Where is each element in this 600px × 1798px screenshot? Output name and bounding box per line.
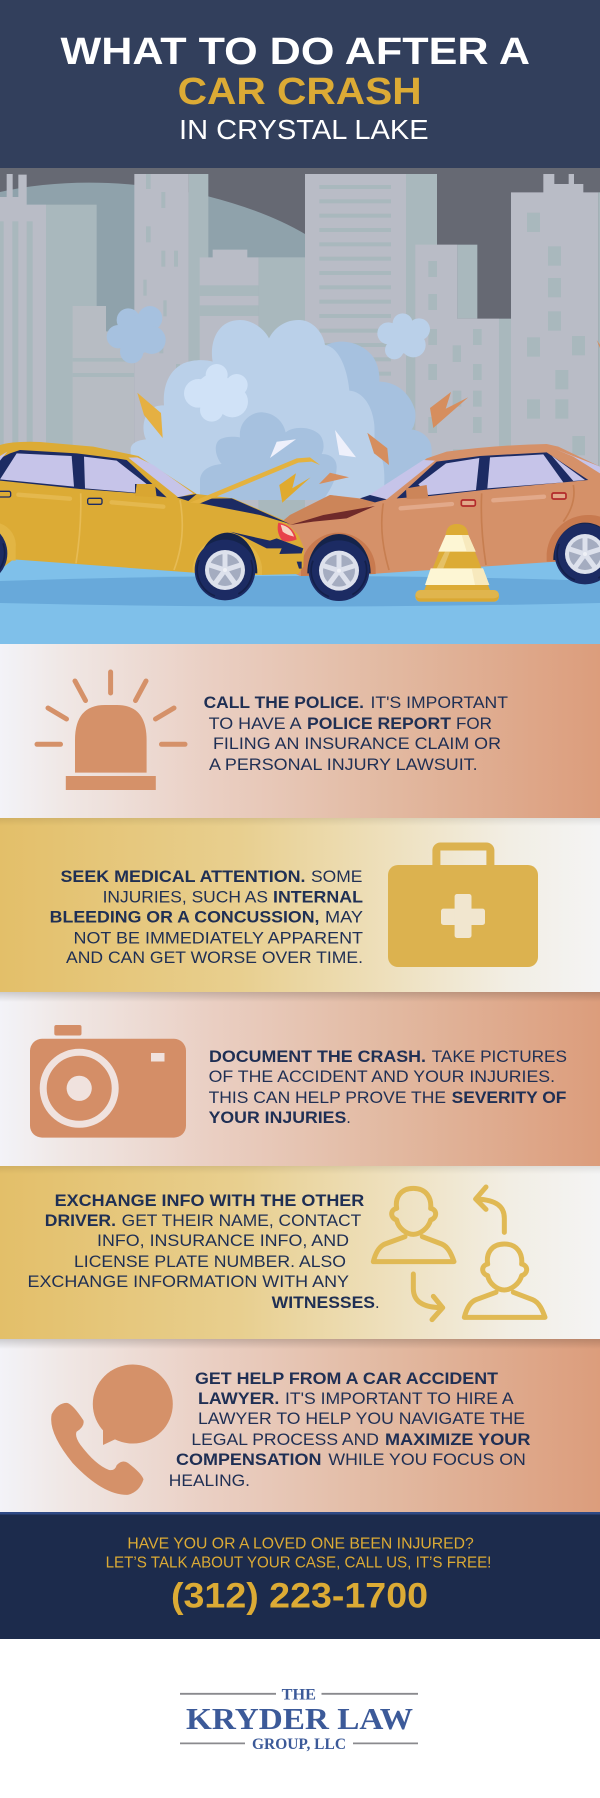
text: call the police: POLICE REPORT — [307, 715, 451, 733]
footer logo — [0, 1639, 600, 1798]
call to action banner: HAVE YOU OR A LOVED ONE BEEN INJURED? — [127, 1536, 474, 1552]
text: call the police: A PERSONAL INJURY LAWSUIT. — [209, 756, 478, 774]
text: call the police: IT'S IMPORTANT — [370, 694, 508, 712]
text: document the crash: OF THE ACCIDENT AND YOUR INJURIES. — [209, 1068, 555, 1086]
text: seek medical attention: AND CAN GET WORSE OVER TIME. — [66, 949, 363, 967]
text: get help: COMPENSATION — [176, 1451, 322, 1469]
text: document the crash: DOCUMENT THE CRASH. — [209, 1048, 426, 1066]
text: get help: LAWYER TO HELP YOU NAVIGATE THE — [198, 1410, 525, 1428]
panel: exchange info — [0, 1166, 600, 1339]
traffic cone — [415, 524, 499, 602]
panel: seek medical attention — [0, 818, 600, 992]
icon: phone with speech bubble — [51, 1364, 173, 1495]
footer logo: GROUP, LLC — [252, 1736, 346, 1753]
text: seek medical attention — [50, 868, 363, 967]
footer logo: KRYDER LAW — [186, 1701, 413, 1736]
text: get help: LAWYER. — [198, 1390, 279, 1408]
footer logo: THE — [282, 1686, 316, 1704]
text: seek medical attention: INTERNAL — [273, 888, 363, 906]
text: call the police: CALL THE POLICE. — [204, 694, 364, 712]
text: get help: GET HELP FROM A CAR ACCIDENT — [195, 1370, 498, 1388]
text: exchange info: EXCHANGE INFORMATION WITH ANY — [28, 1273, 349, 1291]
flying debris — [137, 392, 468, 484]
panel: document the crash — [0, 992, 600, 1166]
orange car — [280, 444, 600, 601]
text: get help: IT'S IMPORTANT TO HIRE A — [285, 1390, 514, 1408]
header title banner — [0, 0, 600, 168]
text: call the police: TO HAVE A — [209, 715, 302, 733]
header title banner: WHAT TO DO AFTER A — [60, 31, 530, 73]
text: document the crash: THIS CAN HELP PROVE THE — [209, 1089, 446, 1107]
call to action banner: (312) 223-1700 — [171, 1576, 428, 1616]
text: document the crash: YOUR INJURIES — [209, 1109, 346, 1127]
yellow car — [0, 442, 320, 600]
text: call the police: FOR — [456, 715, 492, 733]
text: exchange info: GET THEIR NAME, CONTACT — [122, 1212, 361, 1230]
text: document the crash: . — [346, 1109, 351, 1127]
panel: get help from a lawyer — [0, 1339, 600, 1512]
text: get help: LEGAL PROCESS AND — [191, 1431, 379, 1449]
text: exchange info — [28, 1192, 380, 1312]
panel: call the police — [0, 644, 600, 818]
text: seek medical attention: MAY — [325, 908, 363, 926]
header title banner: IN CRYSTAL LAKE — [179, 114, 429, 145]
call to action banner — [0, 1512, 600, 1639]
text: exchange info: INFO, INSURANCE INFO, AND — [97, 1232, 349, 1250]
road — [0, 555, 600, 644]
text: call the police: FILING AN INSURANCE CLAIM OR — [213, 735, 501, 753]
text: seek medical attention: INJURIES, SUCH AS — [103, 888, 268, 906]
text: exchange info: LICENSE PLATE NUMBER. ALSO — [74, 1253, 346, 1271]
text: get help: HEALING. — [169, 1472, 250, 1490]
text: seek medical attention: SOME — [311, 868, 362, 886]
smoke clouds — [107, 306, 432, 500]
icon: siren — [37, 672, 185, 790]
yellow spark — [279, 473, 311, 503]
text: get help: MAXIMIZE YOUR — [385, 1431, 530, 1449]
text: get help — [169, 1370, 530, 1490]
text: get help: WHILE YOU FOCUS ON — [328, 1451, 526, 1469]
text: call the police — [204, 694, 508, 774]
icon: two people exchanging — [373, 1187, 545, 1320]
icon: first aid kit — [388, 846, 538, 967]
city skyline — [0, 168, 600, 644]
text: document the crash — [209, 1048, 567, 1127]
text: exchange info: . — [375, 1294, 380, 1312]
icon: camera — [30, 1025, 186, 1138]
text: seek medical attention: SEEK MEDICAL ATTENTION. — [60, 868, 306, 886]
call to action banner: LET’S TALK ABOUT YOUR CASE, CALL US, IT’S FREE! — [106, 1555, 491, 1572]
text: document the crash: TAKE PICTURES — [432, 1048, 567, 1066]
header title banner: CAR CRASH — [178, 71, 422, 113]
text: document the crash: SEVERITY OF — [452, 1089, 566, 1107]
crash scene illustration — [0, 168, 600, 644]
text: seek medical attention: BLEEDING OR A CONCUSSION, — [50, 908, 319, 926]
text: exchange info: DRIVER. — [45, 1212, 116, 1230]
text: seek medical attention: NOT BE IMMEDIATELY APPARENT — [74, 929, 363, 947]
text: exchange info: EXCHANGE INFO WITH THE OTHER — [55, 1192, 364, 1210]
text: exchange info: WITNESSES — [272, 1294, 375, 1312]
